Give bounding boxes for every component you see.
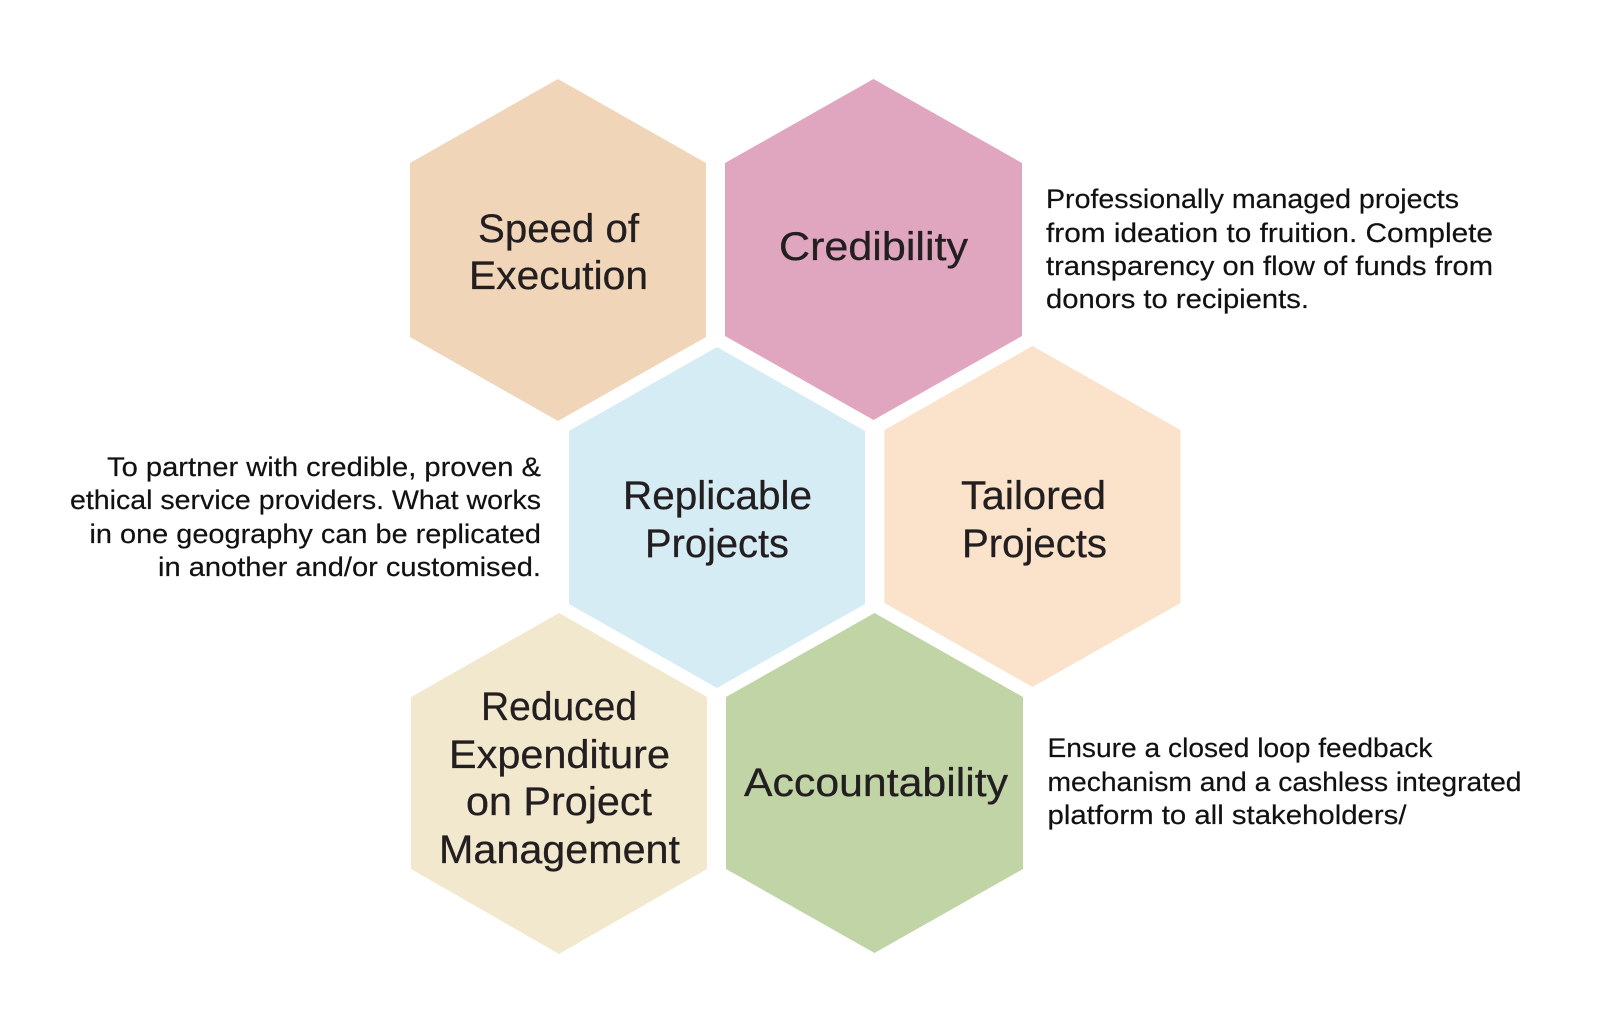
text block: credibility description: donors to recipients. bbox=[1046, 284, 1309, 314]
text block: accountability description bbox=[1048, 733, 1522, 830]
panel: credibility bbox=[725, 79, 1022, 420]
text block: credibility description: Professionally managed projects bbox=[1046, 184, 1459, 214]
text block: accountability description: Ensure a closed loop feedback bbox=[1048, 733, 1433, 763]
panel: replicable projects bbox=[569, 347, 865, 688]
panel: reduced expenditure on project management: Reduced bbox=[481, 685, 637, 729]
panel: tailored projects bbox=[884, 346, 1180, 687]
panel: tailored projects: Projects bbox=[962, 522, 1107, 566]
panel: reduced expenditure on project management: on Project bbox=[466, 780, 652, 824]
panel: reduced expenditure on project management: Expenditure bbox=[449, 733, 670, 777]
panel: speed of execution: Execution bbox=[469, 254, 648, 298]
text block: credibility description bbox=[1046, 184, 1493, 314]
text block: replicable projects description bbox=[70, 452, 541, 582]
text block: replicable projects description: ethical service providers. What works bbox=[70, 485, 541, 515]
panel: accountability: Accountability bbox=[744, 761, 1008, 805]
panel: credibility: Credibility bbox=[779, 225, 968, 269]
panel: accountability bbox=[726, 613, 1023, 953]
text block: replicable projects description: To partner with credible, proven & bbox=[107, 452, 541, 482]
panel: replicable projects: Replicable bbox=[623, 474, 812, 518]
panel: replicable projects: Projects bbox=[645, 522, 789, 566]
text block: credibility description: from ideation to fruition. Complete bbox=[1046, 218, 1493, 248]
panel: reduced expenditure on project management: Management bbox=[439, 828, 680, 872]
text block: credibility description: transparency on flow of funds from bbox=[1046, 251, 1493, 281]
text block: replicable projects description: in one geography can be replicated bbox=[90, 519, 541, 549]
panel: reduced expenditure on project management bbox=[411, 613, 707, 954]
text block: accountability description: platform to all stakeholders/ bbox=[1048, 800, 1407, 830]
panel: speed of execution bbox=[410, 79, 706, 421]
text block: replicable projects description: in another and/or customised. bbox=[158, 552, 541, 582]
panel: speed of execution: Speed of bbox=[478, 207, 640, 251]
panel: tailored projects: Tailored bbox=[961, 474, 1106, 518]
text block: accountability description: mechanism and a cashless integrated bbox=[1048, 767, 1522, 797]
